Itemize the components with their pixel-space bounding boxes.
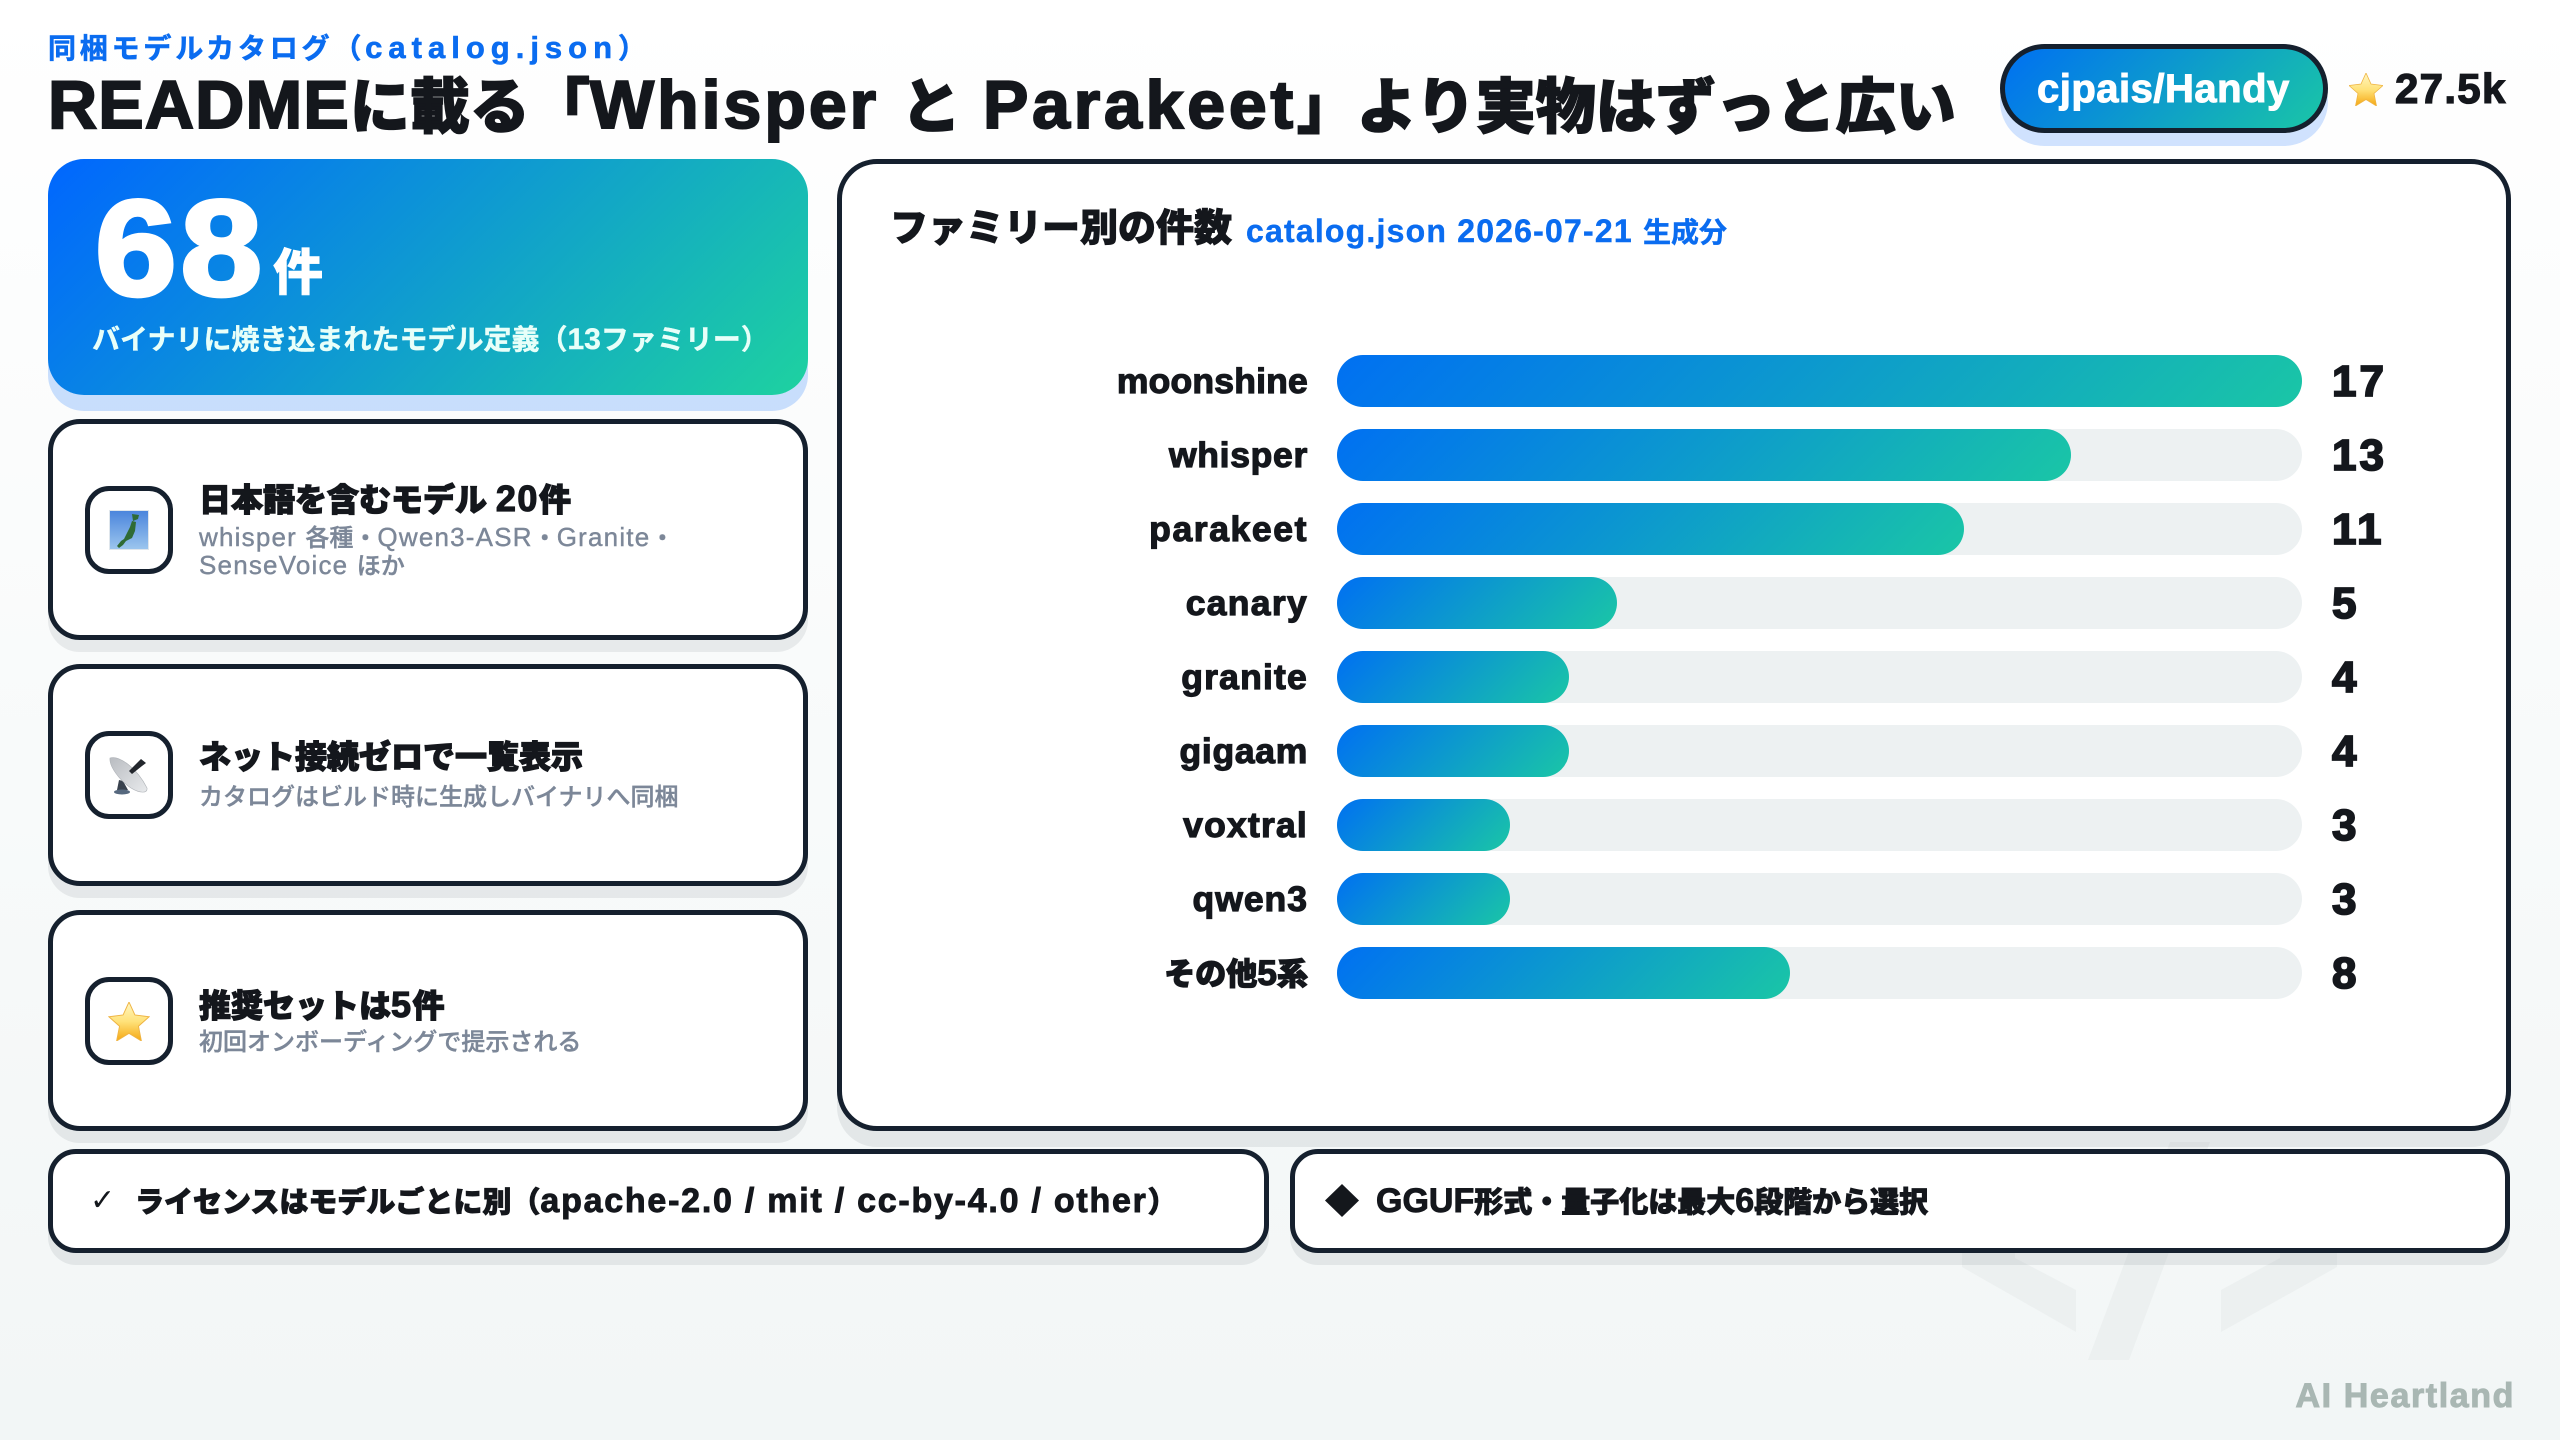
bar row: voxtral	[1337, 799, 2302, 851]
label: canary: canary	[1186, 582, 1308, 622]
chart heading: ファミリー別の件数	[890, 208, 1232, 250]
panel: license note	[48, 1149, 1269, 1253]
card text: japanese models: whisper 各種・Qwen3-ASR・Granite・	[199, 522, 674, 552]
value: gigaam: 4	[2332, 726, 2359, 776]
label: parakeet: parakeet	[1149, 508, 1308, 548]
bar row: whisper	[1337, 429, 2302, 481]
icon: check: ✓	[90, 1183, 115, 1218]
icon: satellite antenna	[85, 731, 173, 819]
value: parakeet: 11	[2332, 504, 2385, 554]
hero caption: バイナリに焼き込まれたモデル定義（13ファミリー）	[92, 323, 769, 356]
card title: japanese models: 日本語を含むモデル 20件	[199, 478, 571, 519]
icon: star	[85, 977, 173, 1065]
panel: japanese models	[48, 419, 808, 640]
label: gigaam: gigaam	[1180, 730, 1308, 770]
brand: AI Heartland	[2296, 1377, 2515, 1415]
bar row: moonshine	[1337, 355, 2302, 407]
bar row: qwen3	[1337, 873, 2302, 925]
icon: star rating	[2349, 73, 2383, 106]
bar row: gigaam	[1337, 725, 2302, 777]
gguf text: GGUF形式・量子化は最大6段階から選択	[1376, 1182, 1928, 1220]
icon: diamond	[1325, 1184, 1359, 1217]
bar row: others	[1337, 947, 2302, 999]
title: READMEに載る「Whisper と Parakeet」より実物はずっと広い	[48, 67, 1956, 143]
value: qwen3: 3	[2332, 874, 2359, 924]
label: qwen3: qwen3	[1193, 878, 1308, 918]
panel: gguf note	[1290, 1149, 2510, 1253]
bar row: canary	[1337, 577, 2302, 629]
card text: recommended: 初回オンボーディングで提示される	[199, 1029, 581, 1056]
watermark: code symbol	[2207, 1148, 2208, 1149]
repo pill	[2000, 44, 2328, 133]
label: others: その他5系	[1164, 952, 1308, 992]
eyebrow: 同梱モデルカタログ（catalog.json）	[48, 30, 650, 65]
panel: recommended	[48, 910, 808, 1131]
panel: family chart	[837, 159, 2511, 1131]
card text: offline: カタログはビルド時に生成しバイナリへ同梱	[199, 784, 679, 811]
value: voxtral: 3	[2332, 800, 2359, 850]
repo name: cjpais/Handy	[2037, 67, 2290, 111]
hero unit: 件	[273, 245, 323, 301]
label: moonshine: moonshine	[1117, 360, 1308, 400]
value: others: 8	[2332, 948, 2359, 998]
value: whisper: 13	[2332, 430, 2387, 480]
bar row: parakeet	[1337, 503, 2302, 555]
label: granite: granite	[1181, 656, 1308, 696]
label: voxtral: voxtral	[1183, 804, 1308, 844]
card title: offline: ネット接続ゼロで一覧表示	[199, 739, 583, 775]
icon: map of japan	[85, 486, 173, 574]
panel: hero stat	[48, 159, 808, 395]
card title: recommended: 推奨セットは5件	[199, 984, 445, 1025]
panel: offline	[48, 664, 808, 886]
license text: ライセンスはモデルごとに別（apache-2.0 / mit / cc-by-4.0 / other）	[135, 1182, 1177, 1220]
value: granite: 4	[2332, 652, 2359, 702]
value: canary: 5	[2332, 578, 2359, 628]
label: whisper: whisper	[1169, 434, 1308, 474]
star count: 27.5k	[2395, 65, 2507, 112]
bar row: granite	[1337, 651, 2302, 703]
hero number: 68	[95, 172, 266, 324]
chart subheading: catalog.json 2026-07-21 生成分	[1246, 213, 1727, 249]
card text: japanese models line 2: SenseVoice ほか	[199, 550, 405, 580]
value: moonshine: 17	[2332, 356, 2387, 406]
